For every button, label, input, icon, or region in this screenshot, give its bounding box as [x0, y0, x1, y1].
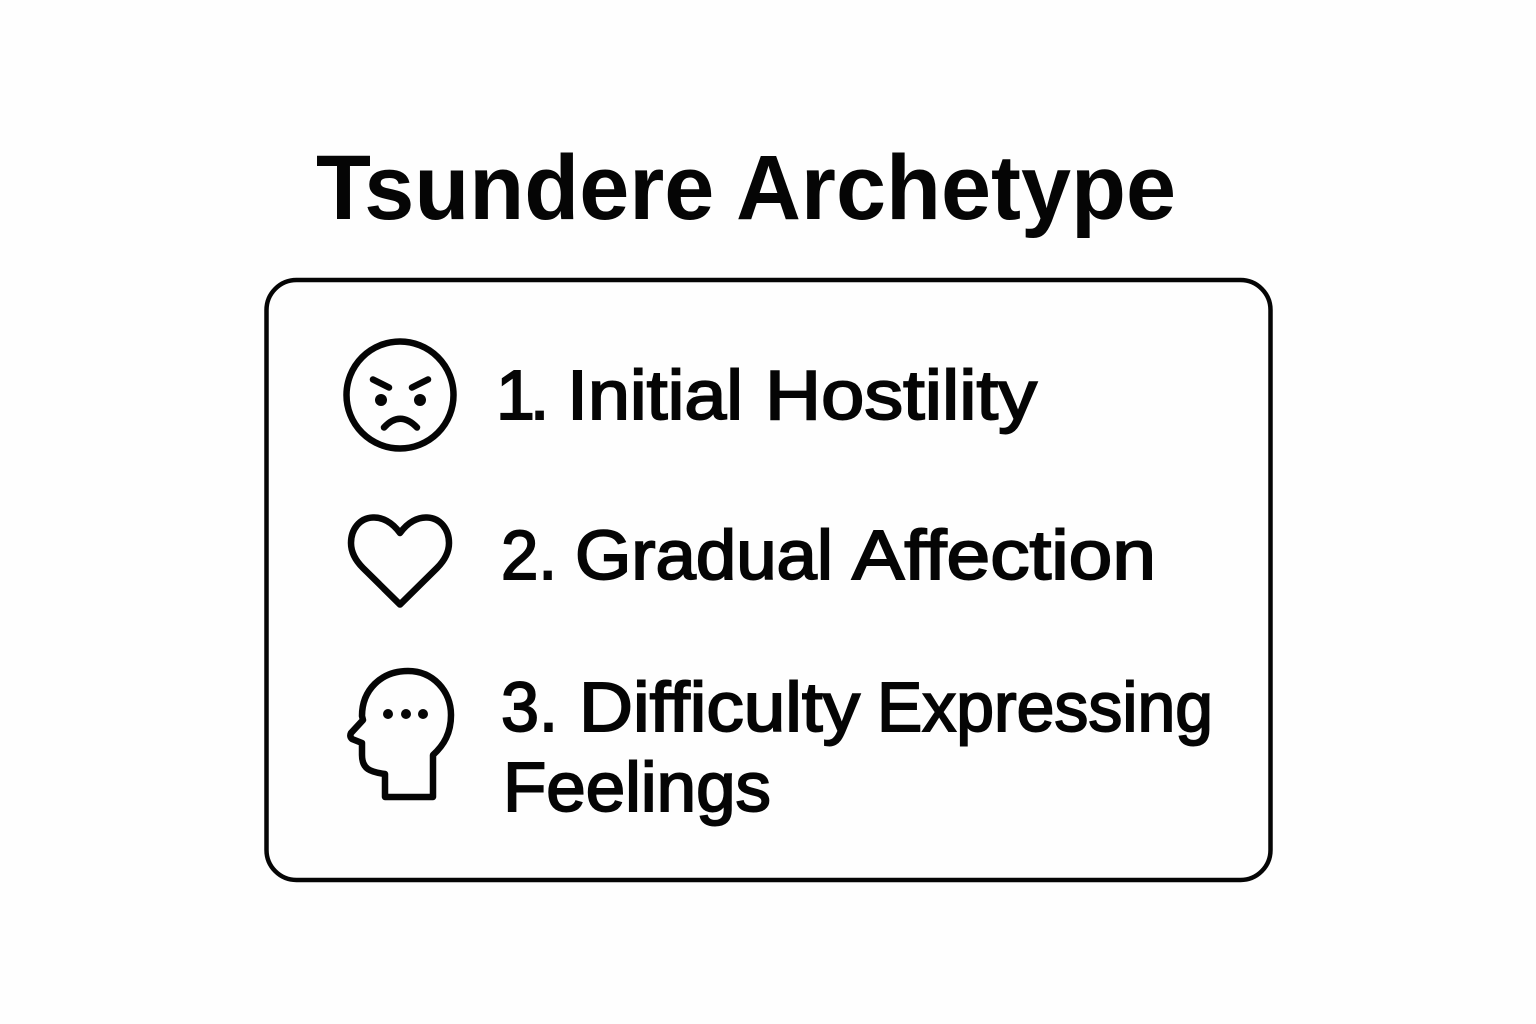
panel: archetype traits	[266, 280, 1270, 880]
text: difficulty expressing feelings	[501, 668, 1213, 826]
text: initial hostility: Hostility	[765, 356, 1037, 434]
icon: head with thought dots	[350, 671, 451, 797]
text: difficulty expressing feelings: Expressing	[877, 668, 1213, 746]
text: gradual affection: 2.	[501, 516, 557, 594]
text: difficulty expressing feelings: 3.	[501, 668, 558, 746]
panel border	[266, 280, 1270, 880]
text: initial hostility: 1.	[496, 356, 544, 434]
text: gradual affection: Gradual	[575, 516, 833, 594]
text: initial hostility	[496, 356, 1037, 434]
title: Tsundere Archetype	[316, 137, 1176, 239]
text: difficulty expressing feelings: Feelings	[503, 748, 771, 826]
text: difficulty expressing feelings: Difficulty	[579, 668, 860, 746]
text: gradual affection: Affection	[852, 516, 1156, 594]
icon: angry face	[346, 342, 454, 448]
icon: heart	[351, 517, 449, 604]
text: gradual affection	[501, 516, 1156, 594]
text: initial hostility: Initial	[567, 356, 743, 434]
